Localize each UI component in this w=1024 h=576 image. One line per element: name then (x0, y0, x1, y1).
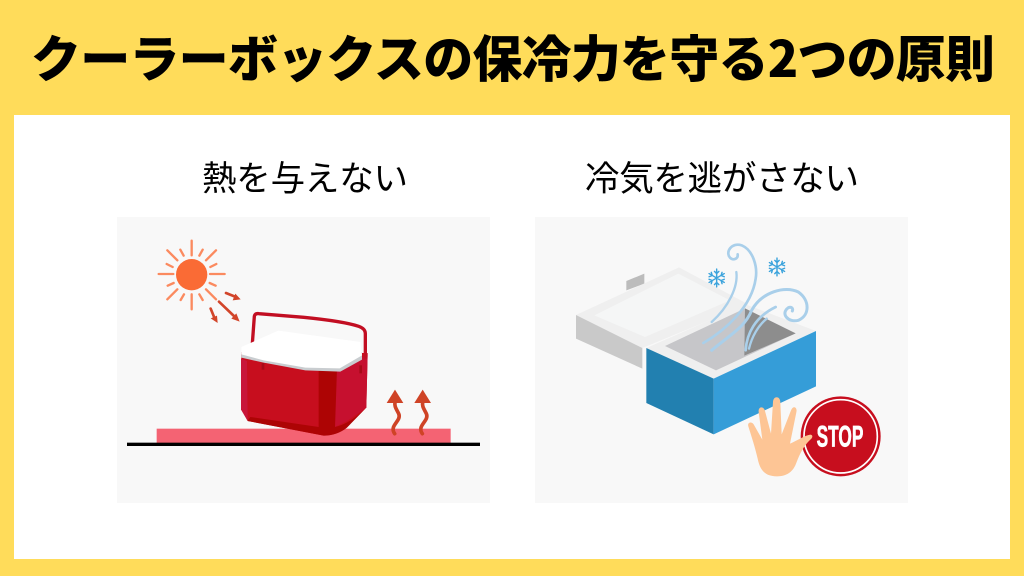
icon: open blue box (646, 304, 816, 434)
icon: stop sign (801, 396, 881, 476)
heading: no heat: 熱を与えない (202, 150, 408, 200)
panel: heat illustration (117, 217, 490, 503)
heading: keep cold air: 冷気を逃がさない (585, 150, 859, 200)
heated ground (157, 429, 451, 444)
icon: heat ray arrows (211, 293, 241, 323)
icon: open lid (576, 267, 748, 369)
panel: cold air illustration (535, 217, 908, 503)
title: クーラーボックスの保冷力を守る2つの原則 (31, 20, 995, 92)
icon: rising heat arrows (387, 390, 431, 434)
ground line (127, 443, 480, 446)
panel: main white card (14, 115, 1010, 559)
icon: raised hand (748, 397, 812, 476)
icon: stop sign: STOP (817, 421, 863, 454)
icon: sun (159, 241, 225, 309)
icon: snowflakes (709, 258, 785, 287)
icon: cold air swirls (703, 245, 807, 350)
icon: red cooler box (241, 314, 368, 436)
